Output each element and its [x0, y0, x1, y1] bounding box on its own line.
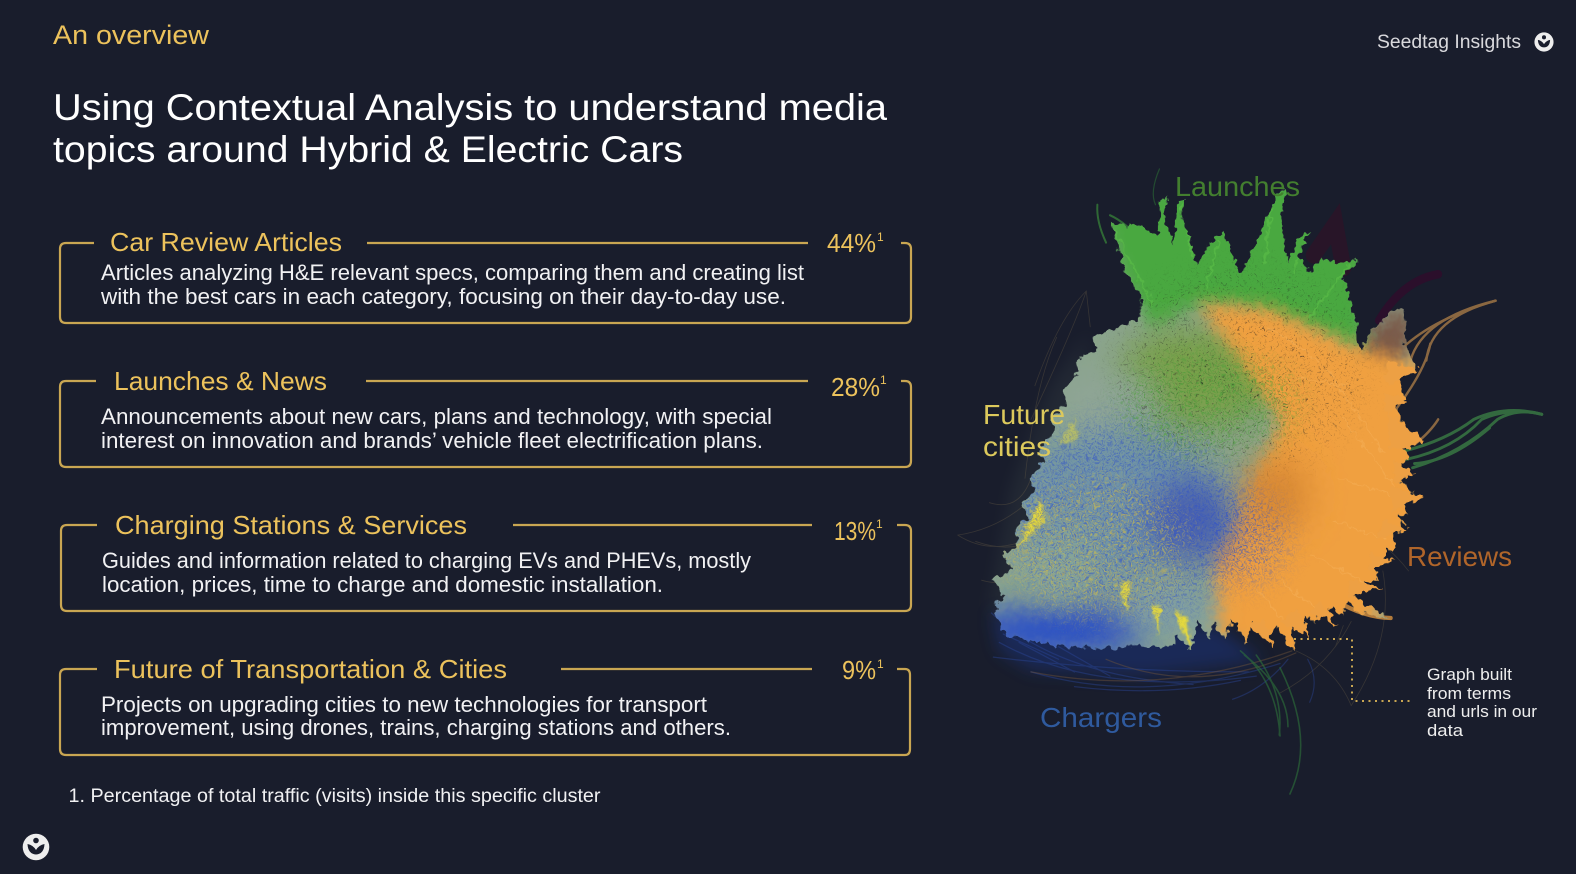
- panel: launches and news: 1: [880, 373, 887, 387]
- dark plume: [1379, 274, 1438, 320]
- callout connector: [1294, 639, 1411, 701]
- panel: car review articles: [60, 227, 911, 323]
- cluster: brown top right: [1360, 308, 1412, 368]
- cluster: launches: [1111, 188, 1375, 350]
- panel: launches and news: Launches & News: [114, 366, 327, 396]
- cluster: chargers: [1015, 436, 1205, 579]
- panel: charging stations and services: [61, 510, 911, 611]
- icon: brand logo: [23, 834, 49, 860]
- callout: graph note: from terms: [1427, 685, 1511, 703]
- cluster: future cities accents: [1017, 419, 1191, 651]
- orange plume: [1395, 301, 1496, 445]
- panel: charging stations and services: 13%: [834, 516, 876, 546]
- panel: charging stations and services: Guides and information related to charging EVs and PHEVs, mostly: [102, 548, 751, 573]
- halo: left fringe: [987, 331, 1090, 613]
- panel: launches and news: Announcements about new cars, plans and technology, with special: [101, 404, 772, 429]
- halo: bottom blue fringe: [991, 613, 1264, 676]
- panel: launches and news: interest on innovation and brands’ vehicle fleet electrification plans.: [101, 428, 763, 453]
- label: Chargers: Chargers: [1040, 702, 1162, 733]
- label: Future cities: Future: [983, 399, 1065, 430]
- label: Future cities: cities: [983, 431, 1051, 462]
- spikes: orange edge: [1248, 360, 1424, 647]
- specks: [1007, 419, 1244, 621]
- panel: car review articles: 44%: [827, 228, 876, 258]
- label: Future cities: [983, 399, 1065, 462]
- green hooks: [1097, 205, 1161, 268]
- panel: car review articles: Car Review Articles: [110, 227, 342, 257]
- green filaments at bottom: [1241, 651, 1301, 794]
- panel: future of transportation and cities: improvement, using drones, trains, charging stations and others.: [101, 715, 731, 740]
- callout: graph note: Graph built: [1427, 666, 1512, 684]
- cluster: sage: [1059, 369, 1161, 445]
- panel: future of transportation and cities: 9%: [842, 655, 876, 685]
- label: Reviews: Reviews: [1407, 541, 1512, 572]
- title: topics around Hybrid & Electric Cars: [53, 129, 683, 170]
- title: Using Contextual Analysis to understand media: [53, 87, 887, 128]
- graph body: [991, 188, 1424, 651]
- panel: launches and news: 28%: [831, 372, 880, 402]
- panel: launches and news: [60, 366, 911, 467]
- label: Launches: Launches: [1175, 171, 1300, 202]
- panel: charging stations and services: 1: [876, 517, 883, 531]
- brand: Seedtag Insights: Seedtag Insights: [1377, 32, 1521, 53]
- section label: An overview: An overview: [53, 20, 210, 50]
- title: [53, 87, 887, 170]
- panel: car review articles: 1: [877, 230, 884, 244]
- panel: future of transportation and cities: 1: [877, 657, 884, 671]
- footnote: 1. Percentage of total traffic (visits) inside this specific cluster: [68, 786, 601, 807]
- orange tail: [1335, 600, 1391, 618]
- cluster: reviews: [1192, 290, 1420, 651]
- texture: fur strokes: [1256, 328, 1394, 620]
- panel: future of transportation and cities: [60, 654, 910, 755]
- callout: graph note: and urls in our: [1427, 703, 1538, 721]
- panel: future of transportation and cities: Projects on upgrading cities to new technologies for transport: [101, 692, 707, 717]
- panel: charging stations and services: location, prices, time to charge and domestic installation.: [102, 572, 663, 597]
- network graph: [958, 169, 1542, 794]
- filaments: outer arcs: [958, 169, 1542, 794]
- panel: car review articles: with the best cars in each category, focusing on their day-to-day use.: [100, 284, 786, 309]
- callout: graph note: [1427, 666, 1538, 740]
- callout: graph note: data: [1427, 722, 1464, 740]
- cluster: green transition: [1114, 327, 1288, 428]
- panel: charging stations and services: Charging Stations & Services: [115, 510, 467, 540]
- green plume right: [1405, 410, 1542, 468]
- panel: future of transportation and cities: Future of Transportation & Cities: [114, 654, 507, 684]
- panel: car review articles: Articles analyzing H&E relevant specs, comparing them and creating list: [101, 260, 804, 285]
